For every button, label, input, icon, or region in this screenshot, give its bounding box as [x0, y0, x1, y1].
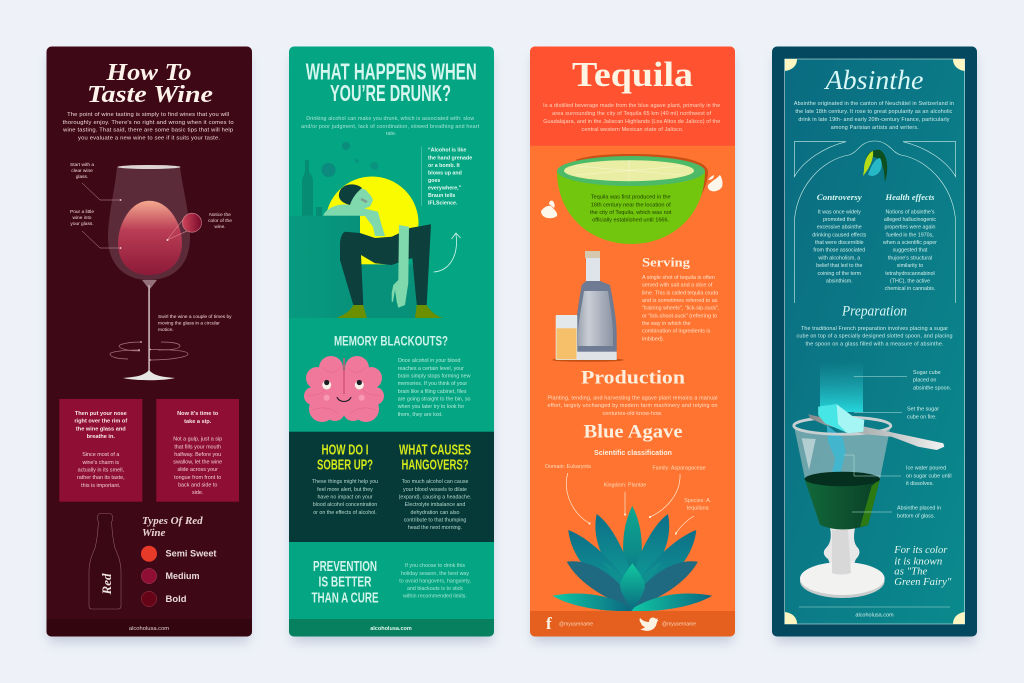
tip box: sip: slide across your — [177, 467, 218, 473]
tip box: sip: back and side to — [178, 482, 217, 488]
tip box: sip — [156, 399, 239, 502]
serving section: the way in which the — [642, 321, 691, 327]
illustration: lime bowl — [557, 154, 708, 244]
quote: goes — [428, 178, 440, 184]
footer: alcoholusa.com — [855, 612, 894, 618]
sober up text: blood alcohol concentration — [313, 502, 377, 508]
glass labels: clear wine — [71, 168, 93, 174]
legend: types of red wine: Medium — [166, 571, 200, 581]
preparation callouts — [844, 377, 907, 512]
memory text: them, they are lost. — [398, 412, 443, 418]
intro text: and/or poor judgment, lack of coordination, slowed breathing and heart — [301, 124, 480, 130]
prevention text: and blackouts is to stick — [407, 586, 463, 592]
preparation labels: Set the sugar — [907, 407, 939, 413]
icon: lime juice drops — [541, 175, 723, 218]
lime text: Tequila was first produced in the — [591, 195, 671, 201]
preparation labels: bottom of glass. — [897, 513, 935, 519]
preparation section: cube on top of a specially designed slotted spoon, and placing — [796, 334, 952, 340]
tip box: nose: Then put your nose — [75, 411, 127, 417]
intro text: area surrounding the city of Tequila 65 km (40 mi) northwest of — [552, 111, 712, 117]
preparation labels: absinthe spoon. — [913, 385, 951, 391]
panel: absinthe — [772, 46, 977, 636]
controversy column: absinthism. — [826, 278, 853, 284]
green fairy callout: Green Fairy" — [894, 576, 952, 588]
controversy column: with alcoholism, a — [818, 255, 860, 261]
preparation labels: cube on fire. — [907, 414, 937, 420]
preparation labels: placed on — [913, 378, 936, 384]
memory text: when you later try to look for — [398, 404, 464, 410]
spoon — [808, 414, 944, 450]
classification arrows — [566, 473, 694, 535]
sober up text: feel more alert, but they — [317, 487, 373, 493]
icon: wormwood leaf — [863, 150, 887, 182]
preparation section: The traditional French preparation involves placing a sugar — [801, 326, 948, 332]
preparation labels — [897, 370, 952, 519]
heading: how do I sober up — [317, 441, 373, 474]
title: Taste Wine — [87, 82, 213, 108]
prevention text: within recommended limits. — [403, 594, 467, 600]
intro text: rate. — [386, 131, 396, 137]
controversy column: promoted that — [823, 217, 856, 223]
memory text: memories. If you think of your — [398, 381, 467, 387]
controversy column: coining of the term — [818, 271, 862, 277]
footer: alcoholusa.com — [129, 626, 169, 632]
heading: how do I sober up: SOBER UP? — [317, 457, 373, 474]
tip box: nose: rather than its taste, — [77, 475, 125, 481]
heading: prevention: IS BETTER — [318, 574, 372, 591]
blue agave heading: Blue Agave — [584, 422, 682, 443]
legend: types of red wine — [141, 515, 216, 607]
sugar cube — [818, 404, 864, 433]
tip box: sip: tongue from front to — [174, 475, 221, 481]
quote — [422, 147, 472, 206]
panel: how to taste wine — [46, 46, 252, 636]
hangovers text: contribute to that thumping — [404, 518, 466, 524]
production section: centuries-old know-how. — [602, 411, 662, 417]
tip box: sip: swallow, let the wine — [173, 460, 222, 466]
quote: “Alcohol is like — [428, 148, 466, 154]
preparation labels: on sugar cube until — [906, 473, 952, 479]
heading: prevention — [312, 558, 378, 606]
arrow — [434, 233, 460, 272]
heading: memory blackouts: MEMORY BLACKOUTS? — [334, 333, 448, 349]
footer: @myusername — [559, 622, 593, 628]
tip box: nose: right over the rim of — [74, 419, 127, 425]
callout lines — [82, 183, 121, 249]
memory text: brain like a filing cabinet, files — [398, 389, 467, 395]
quote: IFLScience. — [428, 200, 458, 206]
heading: what causes hangovers: WHAT CAUSES — [399, 441, 471, 458]
panel shadows — [49, 56, 975, 642]
footer — [289, 619, 494, 636]
intro text: the late 18th century. It rose to great popularity as an alcoholic — [795, 109, 953, 115]
heading: what causes hangovers: HANGOVERS? — [402, 457, 468, 474]
green fairy callout: as "The — [894, 565, 927, 577]
serving section: combination of ingredients is — [642, 329, 711, 335]
preparation section: Preparation — [841, 304, 907, 320]
production section — [548, 367, 718, 417]
legend: types of red wine: Semi Sweet — [166, 548, 216, 558]
wine colour magnifier — [166, 213, 202, 241]
classification labels — [545, 464, 711, 511]
glass labels: color of the — [208, 218, 232, 224]
glass labels: wine. — [214, 224, 226, 230]
hangovers text: head the next morning. — [408, 525, 462, 531]
tip box: nose — [59, 399, 142, 502]
icon: brain — [304, 356, 384, 422]
glass labels: Notice the — [209, 212, 231, 218]
serving section: imbibed). — [642, 336, 664, 342]
health effects column: thujone's structural — [888, 255, 932, 261]
quote: everywhere,” — [428, 186, 462, 192]
legend: types of red wine: Types Of Red — [142, 515, 203, 527]
glass labels: Start with a — [70, 162, 94, 168]
hangovers text: your blood vessels to dilate — [403, 487, 467, 493]
glass labels: wine into — [73, 215, 92, 221]
health effects column — [883, 192, 937, 292]
title: Absinthe — [823, 65, 924, 95]
memory text: Once alcohol in your blood — [398, 358, 460, 364]
heading: prevention: PREVENTION — [313, 558, 377, 575]
controversy column: It was once widely — [818, 209, 861, 215]
classification labels: Kingdom: Plantae — [604, 483, 646, 489]
health effects column: when a scientific paper — [883, 240, 937, 246]
legend: types of red wine: Wine — [142, 527, 166, 539]
health effects column: Health effects — [884, 192, 935, 202]
health effects column: chemical in cannabis. — [885, 286, 935, 292]
quote: the hand grenade — [428, 155, 472, 161]
quote: Braun tells — [428, 193, 455, 199]
preparation labels: it dissolves. — [906, 481, 934, 487]
footer — [46, 619, 252, 636]
glass labels: moving the glass in a circular — [158, 320, 220, 326]
glass labels: Pour a little — [70, 209, 94, 215]
sober up text: or on the effects of alcohol. — [313, 510, 377, 516]
glass labels — [70, 162, 232, 333]
glass labels: Swirl the wine a couple of times by — [158, 314, 232, 320]
sober up text: These things might help you — [312, 479, 378, 485]
serving section — [642, 255, 720, 342]
prevention text: If you choose to drink this — [405, 563, 465, 569]
serving section: and is sometimes referred to as — [642, 298, 718, 304]
intro text: you evaluate a new wine to see if it suits your taste. — [78, 135, 220, 141]
decorative arch frame — [794, 141, 956, 303]
green fairy callout: it is known — [894, 555, 943, 567]
title — [306, 58, 477, 106]
heading: prevention: THAN A CURE — [312, 589, 378, 606]
health effects column: suggested that — [893, 248, 928, 254]
production section: effort, largely unchanged by modern farm machinery and relying on — [548, 403, 718, 409]
icon: facebook: f — [546, 614, 552, 633]
tip box: sip: Now it's time to — [177, 411, 219, 417]
intro text: wine tasting. That said, there are some basic tips that will help — [62, 128, 233, 134]
preparation labels: Ice water poured — [906, 466, 946, 472]
tip box: nose: actually in its smell, — [78, 468, 125, 474]
glass labels: motion. — [158, 327, 174, 333]
icon: wine bottle — [89, 514, 121, 609]
hangovers text: dehydration can also — [411, 510, 459, 516]
header band — [530, 46, 735, 146]
intro text: drink in late 19th- and early 20th-century France, particularly — [798, 117, 950, 123]
title — [87, 60, 213, 108]
tip box: sip: Not a gulp, just a sip — [173, 437, 222, 443]
panel: tequila — [530, 46, 735, 636]
intro text: Is a distilled beverage made from the blue agave plant, primarily in the — [543, 103, 720, 109]
glass labels: your glass. — [70, 221, 94, 227]
preparation section: the spoon on a glass filled with a measure of absinthe. — [806, 341, 944, 347]
memory text: brain simply stops forming new — [398, 374, 471, 380]
health effects column: tetrahydrocannabinol — [885, 271, 935, 277]
production section: Planting, tending, and harvesting the agave plant remains a manual — [548, 396, 718, 402]
memory text: reaches a certain level, your — [398, 366, 464, 372]
controversy column: that were discernible — [815, 240, 864, 246]
intro text: thoroughly enjoy. There's no right and wrong when it comes to — [63, 120, 234, 126]
intro text: The point of wine tasting is simply to find wines that you will — [67, 112, 229, 118]
illustration: absinthe glass — [794, 362, 944, 598]
blue agave heading: Scientific classification — [594, 450, 672, 457]
icon: twitter — [640, 618, 658, 631]
dark band — [289, 432, 494, 542]
tip box: sip: take a sip. — [184, 419, 212, 425]
production section: Production — [581, 367, 685, 388]
illustration: agave plant — [552, 506, 712, 611]
controversy column — [812, 192, 867, 284]
green fairy callout: For its color — [893, 544, 948, 556]
title: YOU’RE DRUNK? — [330, 80, 451, 106]
title: How To — [105, 60, 192, 86]
illustration: drunk man — [289, 142, 443, 318]
controversy column: from those associated — [813, 248, 865, 254]
wine glass illustration — [108, 165, 190, 380]
serving section: or "lick-shoot-suck" (referring to — [642, 313, 717, 319]
intro text: Drinking alcohol can make you drunk, which is associated with: slow — [306, 116, 474, 122]
preparation labels: Absinthe placed in — [897, 506, 941, 512]
tip box: nose: this is important. — [81, 483, 120, 489]
tip box: nose: wine's charm is — [81, 460, 119, 466]
corner ornaments — [785, 59, 964, 624]
quote: or a bomb. It — [428, 163, 460, 169]
tip box: sip: that fills your mouth — [174, 444, 221, 450]
footer — [530, 611, 735, 636]
preparation section — [796, 304, 952, 347]
health effects column: fuelled in the 1970s, — [886, 232, 934, 238]
classification labels: Domain: Eukaryota — [545, 464, 591, 470]
tip box: nose: Since most of a — [82, 452, 119, 458]
controversy column: drinking caused effects — [812, 232, 867, 238]
serving section: lime. This is called tequila cruda — [642, 290, 718, 296]
icon: wine bottle: Red — [99, 573, 114, 595]
glass labels: glass. — [76, 174, 88, 180]
tip box: sip: side. — [192, 490, 203, 496]
intro text: central western Mexican state of Jalisco. — [582, 127, 684, 133]
intro text: Absinthe originated in the canton of Neuchâtel in Switzerland in — [794, 101, 954, 107]
controversy column: Controversy — [817, 192, 862, 202]
intro text: among Parisian artists and writers. — [831, 125, 919, 131]
title: WHAT HAPPENS WHEN — [306, 58, 477, 84]
classification labels: Species: A. — [684, 498, 711, 504]
title: Tequila — [572, 55, 693, 94]
tip box: nose: breathe in. — [87, 434, 115, 440]
health effects column: alleged hallucinogenic — [884, 217, 936, 223]
classification labels: tequilana — [687, 505, 709, 511]
serving section: "training wheels", "lick-sip-suck", — [642, 306, 720, 312]
tip box: nose: the wine glass and — [76, 426, 126, 432]
quote: blows up and — [428, 170, 462, 176]
health effects column: properties were again — [885, 225, 936, 231]
health effects column: Notions of absinthe's — [885, 209, 935, 215]
heading: how do I sober up: HOW DO I — [322, 441, 368, 458]
footer: alcoholusa.com — [370, 626, 412, 632]
lime text: officially established until 1666. — [592, 218, 670, 224]
controversy column: excessive absinthe — [817, 225, 862, 231]
sober up text: have no impact on your — [317, 494, 373, 500]
preparation labels: Sugar cube — [913, 370, 941, 376]
prevention text: to avoid hangovers, hangxiety, — [399, 578, 471, 584]
legend: types of red wine: Bold — [166, 594, 186, 604]
serving section: served with salt and a slice of — [642, 283, 713, 289]
lime text: the city of Tequila, which was not — [590, 210, 672, 216]
footer: @myusername — [662, 622, 696, 628]
panel: what happens when drunk — [289, 46, 494, 636]
serving section: A single shot of tequila is often — [642, 275, 715, 281]
swirl arrows — [110, 341, 188, 361]
hangovers text: (expand), causing a headache. — [399, 494, 471, 500]
intro text: Guadalajara, and in the Jaliscan Highlands (Los Altos de Jalisco) of the — [543, 119, 720, 125]
lime text: 16th century near the location of — [591, 202, 671, 208]
controversy column: belief that led to the — [816, 263, 862, 269]
serving section: Serving — [642, 255, 691, 270]
hangovers text: Electrolyte imbalance and — [405, 502, 465, 508]
memory text: are going straight to the bin, so — [398, 396, 470, 402]
illustration: tequila bottle and shot — [552, 251, 624, 362]
prevention text: holiday season, the best way — [401, 571, 469, 577]
heading: what causes hangovers — [399, 441, 471, 474]
health effects column: (THC), the active — [890, 278, 930, 284]
blue agave heading — [584, 422, 682, 457]
hangovers text: Too much alcohol can cause — [402, 479, 468, 485]
tip box: sip: halfway. Before you — [174, 452, 221, 458]
health effects column: similarity to — [897, 263, 923, 269]
inner framed area — [785, 59, 965, 624]
classification labels: Family: Asparagaceae — [652, 466, 706, 472]
